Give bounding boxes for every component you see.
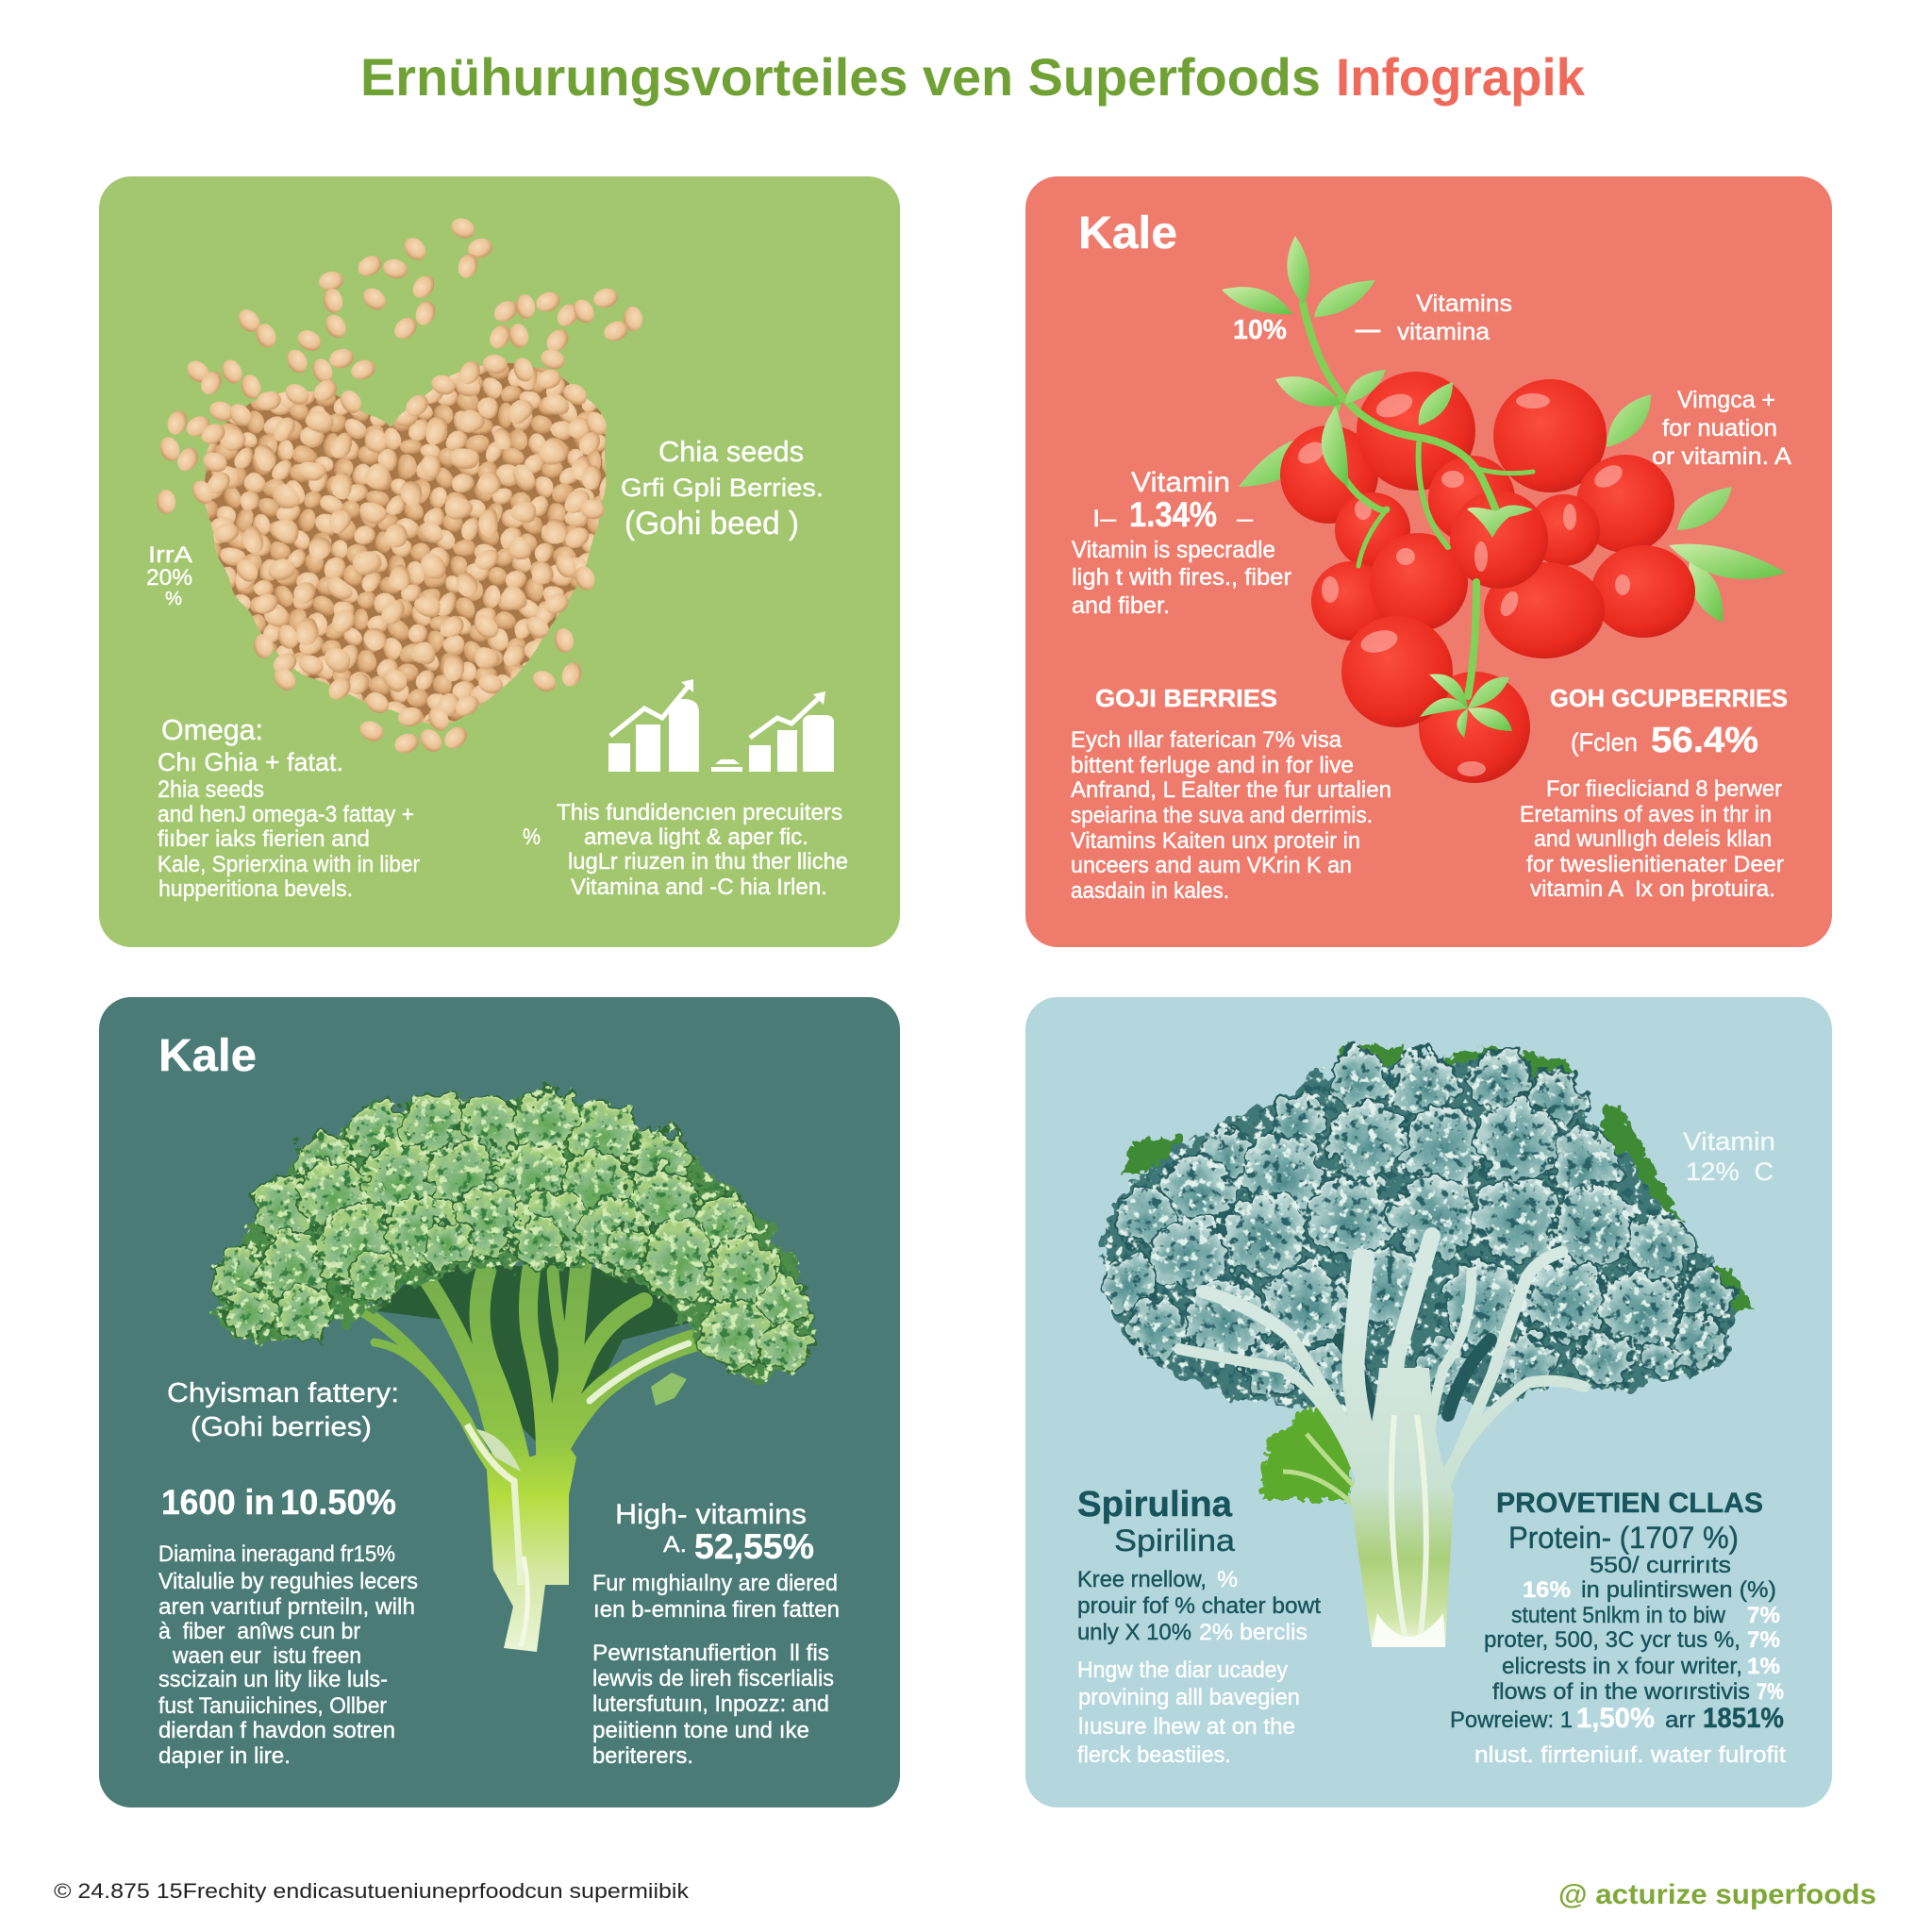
heading: chyisman: [167, 1378, 399, 1442]
text block: mighiailny: beriterers.: [592, 1743, 693, 1769]
text block: protein list: 1%: [1747, 1654, 1780, 1679]
callout: vitamins 10%: vitamina: [1397, 319, 1490, 345]
text block: goh gcupberries 56.4%: (Fclen: [1571, 728, 1638, 757]
text block: protein list: 7%: [1747, 1603, 1780, 1628]
text block: protein list: arr: [1665, 1707, 1695, 1733]
text block: hngw: provining alll bavegien: [1078, 1685, 1300, 1710]
text block: protein list: Powreiew: 1: [1450, 1707, 1573, 1733]
callout: vitamin 1.34%: I–: [1092, 506, 1116, 532]
footer: copyright: © 24.875 15Frechity endicasutueniuneprfoodcun supermiibik: [54, 1879, 690, 1903]
text block: diamina: [158, 1541, 418, 1769]
illustration: red berries on vine: [1222, 236, 1786, 783]
text block: protein list: [1450, 1553, 1786, 1768]
text block: goh gcupberries 56.4%: For fiıecliciand 8 þerwer: [1546, 776, 1782, 802]
text block: goh gcupberries 56.4%: for tweslienitienater Deer: [1526, 852, 1784, 877]
text block: protein list: 7%: [1747, 1627, 1780, 1653]
heading: kale: Kale: [1078, 208, 1177, 258]
heading: chia seeds: Chia seeds: [658, 435, 804, 468]
callout: vitamin 1.34%: ligh t with fires., fiber: [1072, 564, 1291, 591]
text block: goh gcupberries 56.4%: vitamin A Ix on þrotuira.: [1530, 876, 1775, 902]
text block: kree mellow: %: [1217, 1567, 1238, 1592]
callout: vitamin 1.34%: –: [1237, 506, 1253, 532]
panel: goji berries: [1025, 176, 1832, 947]
text block: diamina: waen eur istu freen: [172, 1643, 361, 1669]
text block: fundidencien: [523, 800, 848, 900]
heading: provetien: PROVETIEN CLLAS: [1496, 1488, 1763, 1519]
callout: vitamin 12% C: Vitamin: [1683, 1127, 1775, 1156]
text block: goji berries: Anfrand, L Ealter the fur urtalien: [1071, 777, 1391, 803]
panel: spirulina light blue: [1025, 997, 1832, 1807]
title: Ernühurungsvorteiles ven Superfoods: [360, 47, 1321, 107]
illustration: green kale: [215, 1091, 811, 1652]
text block: goh gcupberries 56.4%: [1520, 684, 1788, 902]
text block: hngw: lıusure lhew at on the: [1078, 1714, 1295, 1740]
text block: goji berries: Vitamins Kaiten unx proteir in: [1071, 828, 1360, 854]
callout: vitamin 1.34%: Vitamin: [1131, 467, 1230, 498]
callout: vitamin 1.34%: [1072, 467, 1291, 619]
text block: diamina: fust Tanuiichines, Ollber: [158, 1693, 387, 1719]
text block: fundidencien: lugLr riuzen in thu ther lliche: [568, 849, 848, 874]
text block: fundidencien: ameva light & aper fic.: [584, 824, 808, 850]
heading: chia seeds: [621, 435, 824, 541]
text block: diamina: à fiber anîws cun br: [158, 1619, 360, 1644]
text block: mighiailny: peiitienn tone und ıke: [592, 1718, 809, 1743]
stat: 20%: %: [165, 589, 182, 609]
text block: kree mellow: Kree rnellow,: [1077, 1567, 1207, 1592]
heading: chia seeds: (Gohi beed ): [625, 506, 799, 541]
text block: diamina: aren varıtıuf prnteiln, wilh: [158, 1594, 415, 1620]
stat: 20%: [146, 542, 192, 609]
heading: spirulina: Spirilina: [1114, 1524, 1235, 1557]
text block: hngw: flerck beastiies.: [1077, 1742, 1231, 1768]
stat: high vitamins 52,55%: 52,55%: [694, 1527, 814, 1566]
stat: 10.50%: [161, 1483, 396, 1522]
callout: vimgca: for nuation: [1662, 415, 1777, 441]
callout: vimgca: [1652, 387, 1791, 470]
icon: bar charts with rising arrows: [608, 679, 834, 772]
panel: kale dark teal: [99, 997, 900, 1807]
text block: diamina: Vitalulie by reguhies lecers: [158, 1569, 418, 1594]
callout: vitamin 12% C: 12% C: [1686, 1158, 1774, 1186]
text block: fundidencien: Vitamina and -C hia Irlen.: [571, 874, 827, 900]
callout: vitamin 1.34%: and fiber.: [1072, 592, 1170, 619]
text block: diamina: dierdan f havdon sotren: [158, 1718, 395, 1743]
callout: vitamins 10%: Vitamins: [1416, 291, 1512, 317]
text block: protein list: 550/ currirıts: [1590, 1553, 1731, 1578]
text block: protein list: flows of in the worırstivis: [1492, 1679, 1750, 1705]
text block: goji berries: GOJI BERRIES: [1095, 684, 1277, 712]
text block: goji berries: aasdain in kales.: [1071, 878, 1229, 904]
text block: protein list: in pulintirswen (%): [1581, 1577, 1776, 1603]
text block: kree mellow: unly X 10%: [1077, 1620, 1191, 1645]
heading: spirulina: [1077, 1485, 1235, 1557]
callout: vitamin 1.34%: 1.34%: [1129, 495, 1217, 534]
footer: brand: @ acturize superfoods: [1558, 1879, 1876, 1910]
stat: high vitamins 52,55%: [615, 1499, 814, 1566]
text block: goji berries: [1071, 684, 1391, 904]
heading: chia seeds: Grfi Gpli Berries.: [621, 474, 824, 502]
text block: protein list: nlust. firrteniuıf. water fulrofit: [1474, 1742, 1786, 1768]
text block: kree mellow: 2% berclis: [1199, 1620, 1307, 1645]
callout: vitamin 12% C: [1683, 1127, 1775, 1186]
heading: provetien: [1496, 1488, 1763, 1555]
text block: protein list: stutent 5nlkm in to biw: [1511, 1603, 1726, 1628]
text block: protein list: 7%: [1757, 1679, 1784, 1705]
stat: high vitamins 52,55%: High- vitamins: [615, 1499, 807, 1530]
text block: omega: Omega:: [161, 713, 263, 746]
text block: fundidencien: This fundidencıen precuiters: [557, 800, 842, 825]
text block: protein list: elicrests in x four writer,: [1502, 1654, 1742, 1679]
text block: goji berries: unceers and aum VKrin K an: [1071, 853, 1352, 878]
text block: fundidencien: %: [523, 824, 541, 850]
text block: kree mellow: [1077, 1567, 1321, 1645]
text block: protein list: 1851%: [1703, 1703, 1784, 1734]
text block: goh gcupberries 56.4%: Eretamins of aves in thr in: [1520, 802, 1772, 827]
text block: mighiailny: Pewrıstanufiertion ll fis: [592, 1641, 829, 1666]
text block: diamina: sscizain un lity like luls-: [158, 1667, 388, 1692]
text block: omega: Chı Ghia + fatat.: [158, 748, 343, 776]
text block: mighiailny: ıen b-emnina firen fatten: [593, 1597, 840, 1623]
heading: kale: Kale: [158, 1031, 257, 1081]
heading: chyisman: Chyisman fattery:: [167, 1378, 399, 1408]
text block: hngw: [1077, 1657, 1300, 1768]
text block: hngw: Hngw the diar ucadey: [1077, 1657, 1288, 1683]
callout: vitamins 10%: 10%: [1233, 315, 1287, 345]
text block: goh gcupberries 56.4%: 56.4%: [1651, 721, 1758, 760]
stat: 20%: IrrA: [148, 542, 192, 568]
heading: spirulina: Spirulina: [1077, 1485, 1233, 1524]
text block: goji berries: speiarina the suva and derrimis.: [1071, 803, 1373, 828]
text block: diamina: dapıer in lire.: [158, 1743, 291, 1769]
text block: diamina: Diamina ineragand fr15%: [158, 1541, 395, 1567]
text block: mighiailny: lutersfutuın, Inpozz: and: [592, 1691, 829, 1717]
text block: goji berries: bittent ferluge and in for live: [1071, 753, 1354, 778]
text block: mighiailny: Fur mıghiaılny are diered: [592, 1571, 838, 1596]
callout: vitamins 10%: [1233, 291, 1512, 345]
panel: chia seeds: [99, 176, 900, 947]
stat: 10.50%: 1600 in: [161, 1483, 275, 1522]
text block: goh gcupberries 56.4%: GOH GCUPBERRIES: [1550, 684, 1788, 712]
text block: protein list: proter, 500, 3C ycr tus %,: [1484, 1627, 1740, 1653]
text block: omega: 2hia seeds: [158, 776, 264, 803]
stat: 10.50%: 10.50%: [280, 1483, 396, 1522]
illustration: blue-green kale: [1101, 1043, 1753, 1647]
heading: provetien: Protein- (1707 %): [1508, 1521, 1739, 1555]
text block: protein list: 16%: [1523, 1577, 1571, 1603]
title: Infograpik: [1336, 47, 1586, 107]
text block: omega: Kale, Sprierxina with in liber: [158, 852, 420, 877]
heading: chyisman: (Gohi berries): [191, 1412, 372, 1442]
text block: omega: [158, 713, 420, 902]
text block: omega: hupperitiona bevels.: [158, 876, 353, 902]
callout: vimgca: Vimgca +: [1677, 387, 1775, 413]
text block: goh gcupberries 56.4%: and wunllıgh deleis kllan: [1534, 826, 1772, 852]
text block: kree mellow: prouir fof % chater bowt: [1077, 1593, 1321, 1619]
text block: mighiailny: [592, 1571, 840, 1769]
stat: 20%: 20%: [146, 565, 192, 591]
text block: goji berries: Eych ıllar faterican 7% visa: [1071, 727, 1342, 753]
text block: mighiailny: lewvis de lireh fiscerlialis: [592, 1666, 834, 1691]
text block: omega: and henJ omega-3 fattay +: [158, 802, 414, 827]
callout: vimgca: or vitamin. A: [1652, 443, 1791, 470]
text block: protein list: 1,50%: [1576, 1703, 1655, 1734]
callout: vitamin 1.34%: Vitamin is specradle: [1072, 537, 1275, 563]
stat: high vitamins 52,55%: A.: [663, 1532, 687, 1557]
text block: omega: fiıber iaks fierien and: [158, 826, 370, 852]
illustration: heart of chia seeds: [156, 214, 643, 757]
